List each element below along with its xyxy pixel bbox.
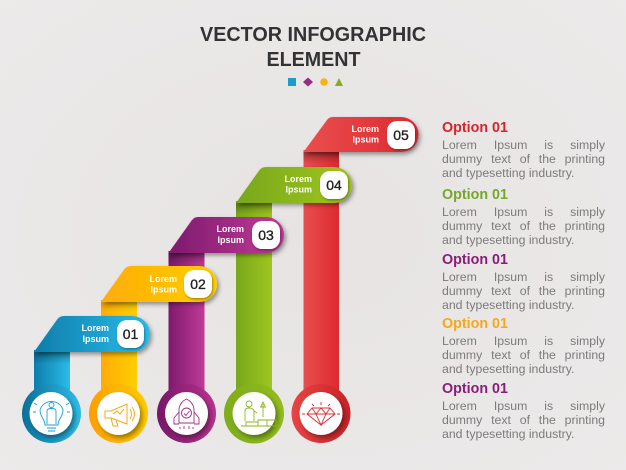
option 4 text block: Option 01 <box>442 316 508 332</box>
option 1 text block: Option 01 <box>442 120 508 136</box>
red banner <box>304 117 418 152</box>
yellow fold shadow <box>101 302 137 312</box>
number 03: 03 <box>258 227 274 243</box>
option 2 text block: Lorem Ipsum is simply <box>442 205 605 219</box>
icon: lightbulb with figure <box>33 401 70 431</box>
icon disc 3: rocket <box>157 384 216 443</box>
option 5 text block: dummy text of the printing <box>442 413 605 427</box>
blue fold shadow <box>34 352 70 364</box>
yellow banner <box>101 266 217 302</box>
number 01: 01 <box>123 326 138 342</box>
number 05: 05 <box>393 127 409 143</box>
option 1 text block: and typesetting industry. <box>442 166 574 180</box>
option 4 text block <box>442 316 605 376</box>
step 05: red ribbon <box>304 117 418 400</box>
purple fold shadow <box>168 253 204 265</box>
purple column <box>168 251 204 401</box>
purple banner label: Lorem <box>216 224 244 234</box>
blue banner label: Ipsum <box>82 334 109 344</box>
option 5 text block <box>442 381 605 441</box>
title: VECTOR INFOGRAPHIC <box>200 23 426 46</box>
number 04 <box>320 171 348 199</box>
green column <box>236 201 272 401</box>
green fold shadow <box>236 203 272 215</box>
green banner <box>236 167 352 203</box>
yellow column <box>101 300 137 400</box>
option 1 text block <box>442 120 605 180</box>
number 02: 02 <box>190 276 206 292</box>
green banner label: Ipsum <box>285 184 312 194</box>
step 02: yellow ribbon <box>101 266 217 400</box>
yellow banner label: Lorem <box>149 274 177 284</box>
option 2 text block <box>442 187 605 247</box>
icon: rocket <box>174 399 199 429</box>
red column <box>304 150 339 400</box>
icon disc 5: diamond <box>292 384 350 443</box>
option 5 text block: Option 01 <box>442 381 508 397</box>
green banner label: Lorem <box>284 174 312 184</box>
option 3 text block: Option 01 <box>442 252 508 268</box>
icon: megaphone <box>105 404 134 426</box>
purple banner label: Ipsum <box>217 235 244 245</box>
option 2 text block: Option 01 <box>442 187 508 203</box>
title decoration: four small shapes <box>288 78 343 86</box>
yellow banner label: Ipsum <box>150 284 177 294</box>
icon: person climbing steps with arrow <box>241 401 276 426</box>
step 04: green ribbon <box>236 167 352 401</box>
option 3 text block: and typesetting industry. <box>442 298 574 312</box>
option 1 text block: Lorem Ipsum is simply <box>442 138 605 152</box>
option 3 text block: dummy text of the printing <box>442 284 605 298</box>
number 05 <box>387 121 415 149</box>
option 1 text block: dummy text of the printing <box>442 152 605 166</box>
option 5 text block: and typesetting industry. <box>442 427 574 441</box>
option 3 text block: Lorem Ipsum is simply <box>442 270 605 284</box>
step 03: purple ribbon <box>168 217 284 401</box>
title: ELEMENT <box>266 48 361 71</box>
icon disc 4: person on steps <box>224 384 284 444</box>
red fold shadow <box>304 152 339 164</box>
red banner label: Ipsum <box>352 134 379 144</box>
number 04: 04 <box>326 177 342 193</box>
icon: diamond <box>302 402 340 425</box>
option 2 text block: dummy text of the printing <box>442 219 605 233</box>
number 03 <box>252 221 280 249</box>
step 01: blue ribbon <box>34 316 150 400</box>
blue banner <box>34 316 150 352</box>
red banner label: Lorem <box>351 124 379 134</box>
purple banner <box>168 217 284 253</box>
blue column <box>34 350 70 400</box>
option 4 text block: dummy text of the printing <box>442 348 605 362</box>
option 4 text block: and typesetting industry. <box>442 362 574 376</box>
option 2 text block: and typesetting industry. <box>442 233 574 247</box>
icon disc 1: lightbulb <box>22 384 81 443</box>
option 5 text block: Lorem Ipsum is simply <box>442 399 605 413</box>
icon disc 2: megaphone <box>89 384 148 443</box>
blue banner label: Lorem <box>81 323 109 333</box>
title <box>200 23 426 71</box>
option 3 text block <box>442 252 605 312</box>
option 4 text block: Lorem Ipsum is simply <box>442 334 605 348</box>
